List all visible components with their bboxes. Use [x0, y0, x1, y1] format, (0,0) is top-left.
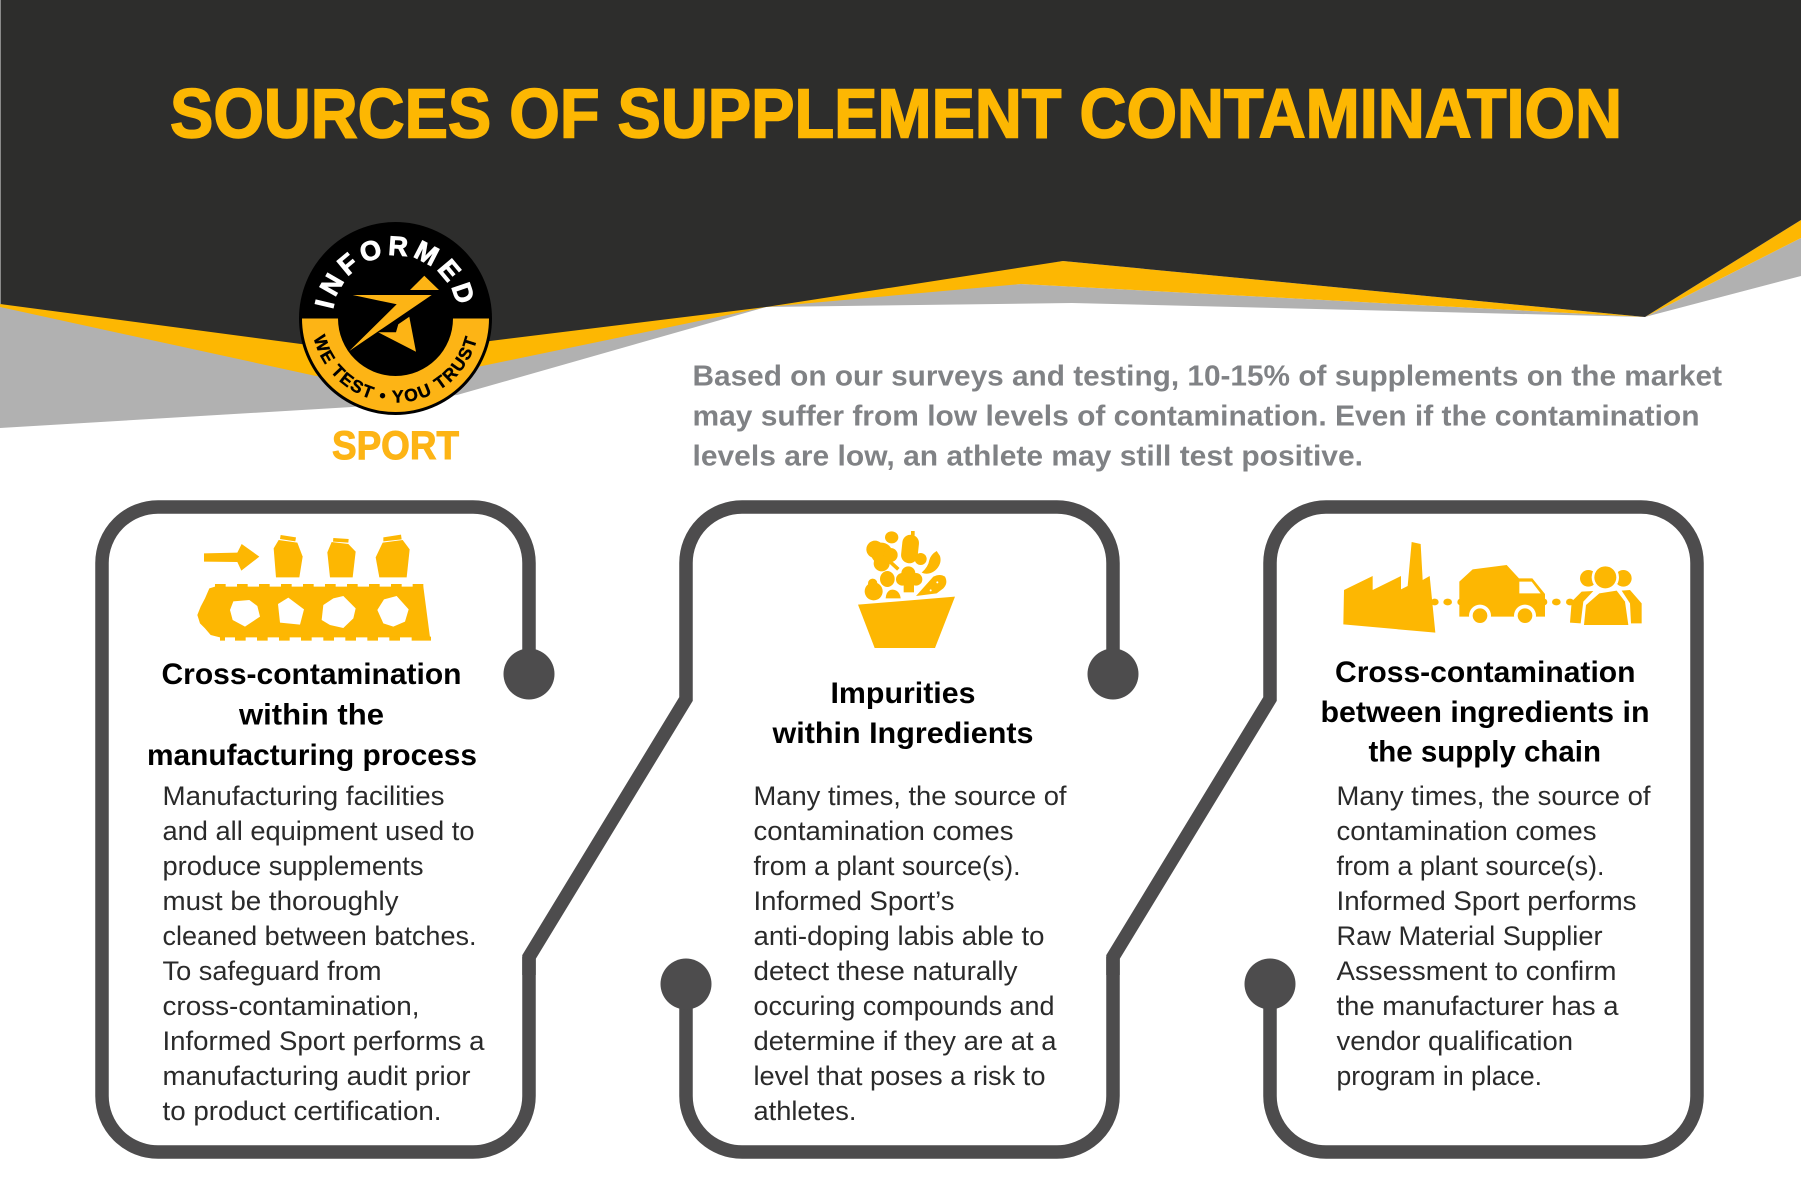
body text: Assessment to confirm	[1336, 956, 1616, 986]
panel outline with connector dot	[102, 507, 554, 1152]
body text: Many times, the source of	[754, 781, 1067, 811]
intro paragraph: may suffer from low levels of contamination. Even if the contamination	[692, 400, 1700, 432]
intro paragraph: levels are low, an athlete may still test positive.	[692, 440, 1363, 472]
intro paragraph: Based on our surveys and testing, 10-15% of supplements on the market	[692, 360, 1723, 392]
body text: Informed Sport performs	[1336, 886, 1636, 916]
header background bands	[0, 0, 1801, 428]
heading	[771, 677, 1034, 750]
body text: program in place.	[1336, 1061, 1542, 1091]
body text: anti-doping labis able to	[754, 921, 1044, 951]
body text: athletes.	[754, 1096, 856, 1126]
body text	[162, 781, 485, 1126]
body text: Raw Material Supplier	[1336, 921, 1603, 951]
heading	[1320, 656, 1650, 768]
heading: Cross-contamination	[1335, 656, 1636, 689]
body text	[1336, 781, 1651, 1091]
body text: detect these naturally	[754, 956, 1018, 986]
heading: Impurities	[830, 677, 976, 710]
heading: Cross-contamination	[162, 658, 462, 691]
heading: within the	[238, 698, 384, 732]
heading: between ingredients in	[1320, 696, 1650, 729]
icon: factory, truck and people	[1343, 542, 1642, 633]
panel outline with connectors	[529, 507, 1138, 1152]
icon: bowl of plants and foods	[858, 531, 955, 648]
body text: to product certification.	[162, 1096, 442, 1126]
panel: cross-contamination within the manufacturing process	[102, 507, 554, 1152]
body text: Many times, the source of	[1336, 781, 1651, 811]
heading: the supply chain	[1368, 736, 1601, 768]
heading: within Ingredients	[771, 717, 1034, 750]
icon: conveyor belt with bottles	[197, 535, 431, 641]
body text: To safeguard from	[162, 956, 382, 986]
body text: vendor qualification	[1336, 1026, 1573, 1056]
panel: cross-contamination between ingredients in the supply chain	[1113, 507, 1697, 1152]
body text: determine if they are at a	[754, 1026, 1057, 1056]
body text: produce supplements	[162, 851, 424, 881]
heading	[147, 658, 477, 772]
body text: from a plant source(s).	[754, 851, 1020, 881]
title: SOURCES OF SUPPLEMENT CONTAMINATION	[170, 74, 1622, 152]
body text: from a plant source(s).	[1336, 851, 1604, 881]
body text: cleaned between batches.	[162, 921, 476, 951]
logo: Informed Sport badge: INFORMED	[314, 236, 473, 308]
logo wordmark: SPORT: SPORT	[332, 424, 459, 468]
body text: the manufacturer has a	[1336, 991, 1619, 1021]
body text: Informed Sport performs a	[162, 1026, 485, 1056]
body text: occuring compounds and	[754, 991, 1054, 1021]
body text: and all equipment used to	[162, 816, 474, 846]
logo: Informed Sport badge	[299, 222, 492, 415]
body text: cross-contamination,	[162, 991, 420, 1021]
body text: manufacturing audit prior	[162, 1061, 470, 1091]
body text: contamination comes	[754, 816, 1014, 846]
body text: Manufacturing facilities	[162, 781, 444, 811]
body text: must be thoroughly	[162, 886, 399, 916]
intro paragraph	[692, 360, 1723, 472]
panel outline with connectors	[1113, 507, 1697, 1152]
body text: level that poses a risk to	[754, 1061, 1046, 1091]
body text	[754, 781, 1067, 1126]
heading: manufacturing process	[147, 739, 477, 772]
body text: Informed Sport’s	[754, 886, 954, 916]
logo: Informed Sport badge: WE TEST • YOU TRUST	[314, 333, 476, 403]
panel: impurities within ingredients	[529, 507, 1138, 1152]
body text: contamination comes	[1336, 816, 1596, 846]
